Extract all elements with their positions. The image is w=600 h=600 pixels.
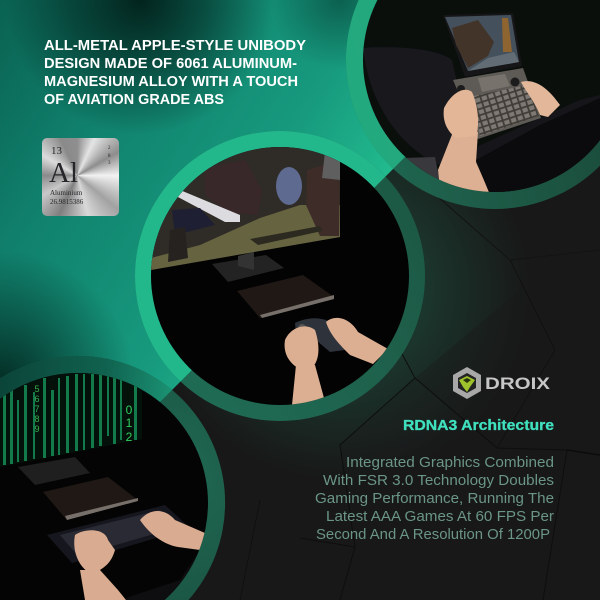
icon: aluminium periodic table tile: 26.9815386 <box>50 198 83 206</box>
shirt <box>476 98 600 195</box>
hands <box>74 511 205 600</box>
handheld base <box>453 68 541 139</box>
matrix screen <box>0 373 142 467</box>
ring: top right circle <box>346 0 600 209</box>
icon: aluminium periodic table tile: Al <box>49 157 78 189</box>
monitor stand <box>212 252 284 282</box>
monitor screen <box>151 147 340 270</box>
keyboard <box>47 505 190 563</box>
mini PC <box>237 275 334 318</box>
title: DESIGN MADE OF 6061 ALUMINUM- <box>44 56 297 72</box>
monitor stand <box>18 457 90 485</box>
matrix screen: 8 <box>34 414 40 424</box>
matrix screen: 6 <box>34 394 40 404</box>
icon: aluminium periodic table tile <box>42 138 119 216</box>
heading: RDNA3 Architecture: RDNA3 Architecture <box>403 417 554 434</box>
panel: bright green gradient <box>0 0 394 390</box>
screen <box>443 13 522 77</box>
chair <box>406 157 439 180</box>
logo: DROIX: DROIX <box>485 374 551 393</box>
ring: bottom left circle <box>0 356 225 600</box>
body text: Second And A Resolution Of 1200P <box>316 526 550 543</box>
logo: DROIX <box>453 367 551 399</box>
forearm and hands <box>438 132 490 194</box>
title: OF AVIATION GRADE ABS <box>44 92 224 108</box>
matrix screen: 5 <box>34 384 40 394</box>
body text: Latest AAA Games At 60 FPS Per <box>326 508 554 525</box>
icon: aluminium periodic table tile: Aluminium <box>50 189 82 197</box>
title: ALL-METAL APPLE-STYLE UNIBODY <box>44 38 306 54</box>
title: MAGNESIUM ALLOY WITH A TOUCH <box>44 74 298 90</box>
shirt <box>126 553 205 600</box>
matrix screen: 2 <box>126 430 133 444</box>
matrix screen: 0 <box>126 403 133 417</box>
title <box>44 38 306 108</box>
matrix screen: 7 <box>34 404 40 414</box>
body text <box>315 454 554 543</box>
body text: With FSR 3.0 Technology Doubles <box>323 472 554 489</box>
icon: aluminium periodic table tile: 2 8 3 <box>108 146 110 166</box>
body text: Gaming Performance, Running The <box>315 490 554 507</box>
matrix screen: 9 <box>34 424 40 434</box>
body text: Integrated Graphics Combined <box>346 454 554 471</box>
matrix screen: 1 <box>126 416 133 430</box>
photo: desktop with keyboard <box>0 373 208 600</box>
trousers <box>363 47 458 165</box>
controller <box>295 318 345 352</box>
icon: aluminium periodic table tile: 13 <box>51 145 62 157</box>
hands <box>285 318 388 405</box>
photo: handheld on lap <box>360 0 600 195</box>
photo: monitor, mini PC and controller <box>151 147 409 405</box>
logo hexagon icon <box>453 367 481 399</box>
ring: main circle <box>135 131 425 421</box>
mini PC <box>43 477 138 520</box>
